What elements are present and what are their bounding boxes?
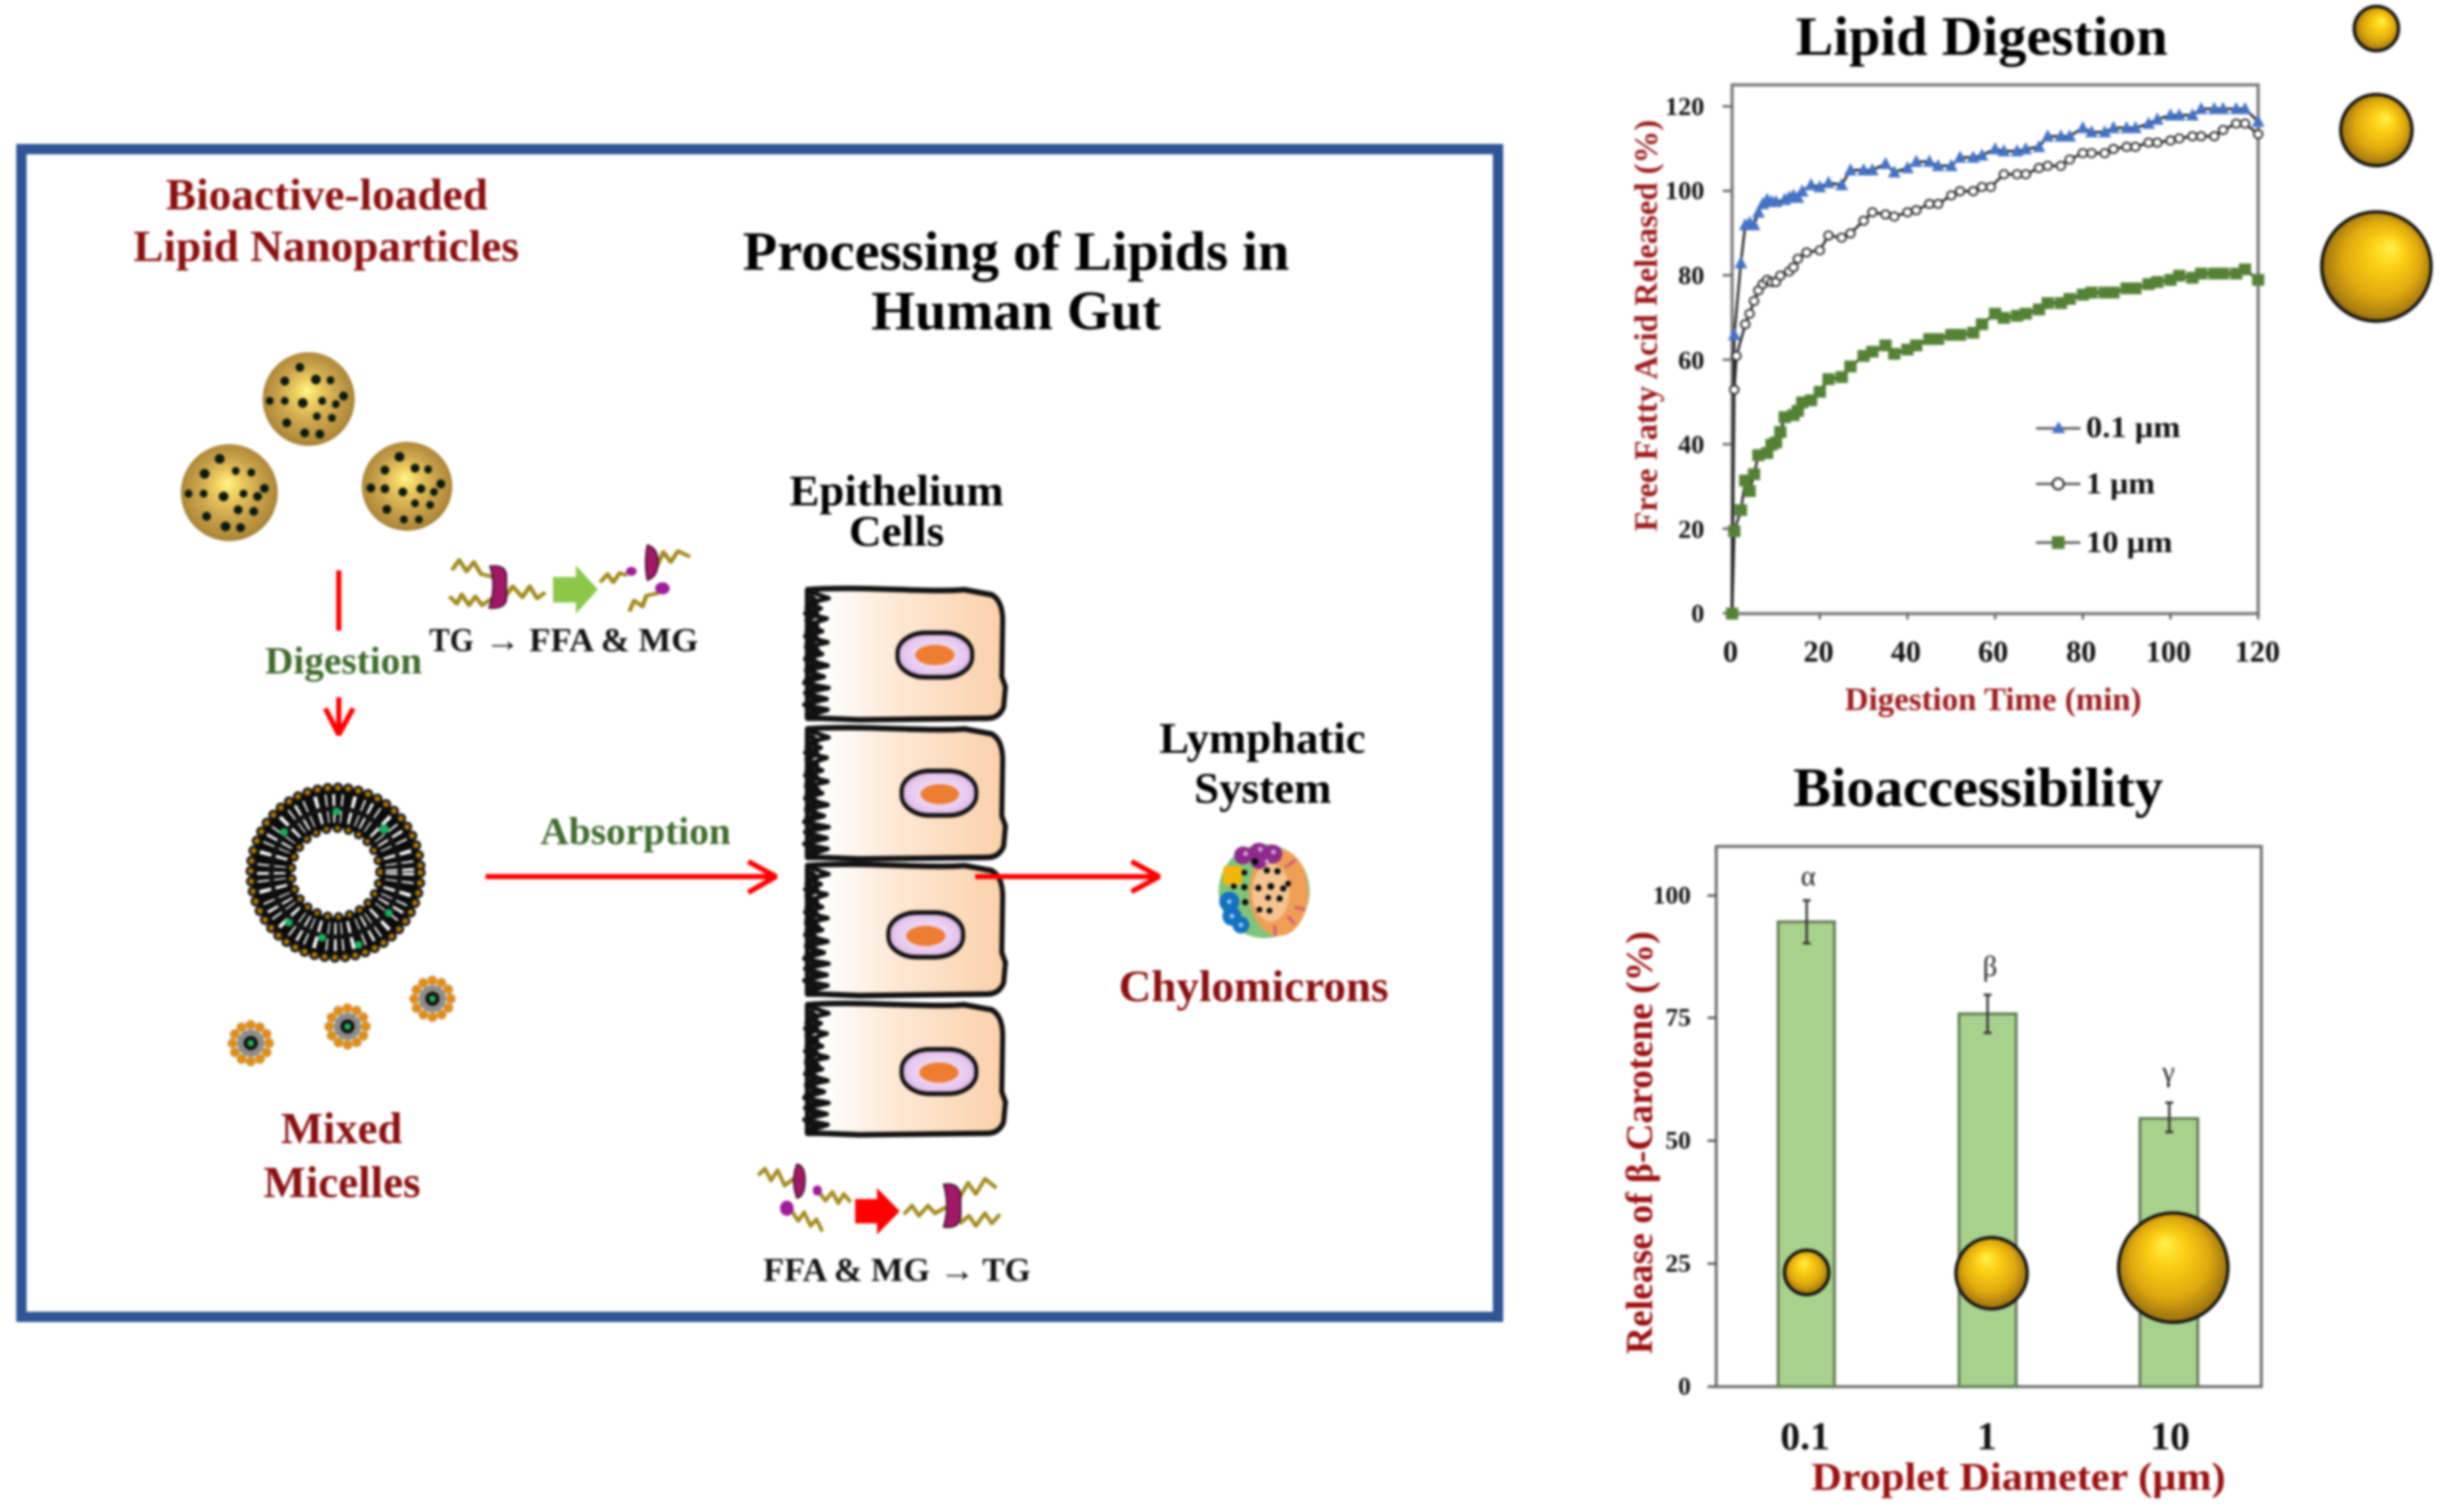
- heading: processing of lipids: [743, 221, 1289, 342]
- arrow: absorption: [486, 862, 776, 892]
- label: bioactive-loaded lipid nanoparticles: Lipid Nanoparticles: [133, 222, 519, 271]
- arrow: to lymphatic system: [975, 862, 1159, 892]
- series: 1 micron: [1732, 124, 2258, 613]
- icon: lipid micelle ring: [251, 788, 421, 957]
- y axis labels: 0: [1692, 600, 1704, 628]
- legend: 0.1 µm: [2086, 411, 2180, 444]
- label: FFA and MG to TG: →: [939, 1253, 975, 1289]
- x axis labels: 0: [1723, 635, 1738, 669]
- x axis labels: 0.1: [1781, 1414, 1830, 1458]
- x axis labels: [1781, 1414, 2190, 1458]
- label: epithelium cells: [789, 466, 1004, 555]
- panel: processing of lipids in human gut: [21, 149, 1498, 1317]
- bars: [1778, 922, 2198, 1387]
- label: FFA and MG to TG: TG: [982, 1253, 1031, 1289]
- series: 10 micron: [1732, 270, 2258, 614]
- legend: 1 µm: [2086, 467, 2155, 501]
- x axis labels: 100: [2145, 635, 2192, 669]
- significance letters: α: [1801, 860, 1816, 892]
- legend: [2036, 411, 2180, 559]
- heading: processing of lipids: Human Gut: [871, 281, 1161, 342]
- x axis labels: 60: [1978, 635, 2008, 669]
- label: lymphatic system: Lymphatic: [1159, 714, 1366, 762]
- y axis labels: 40: [1678, 431, 1704, 459]
- y axis title: Free Fatty Acid Released (%): [1627, 120, 1664, 532]
- arrow: digestion (upper segment): [336, 570, 341, 631]
- label: TG to FFA and MG: FFA & MG: [529, 623, 698, 659]
- y axis labels: [1653, 881, 1691, 1400]
- label: FFA and MG to TG: FFA & MG: [763, 1253, 930, 1289]
- heading: lipid digestion: Lipid Digestion: [1796, 6, 2168, 67]
- icon: lipid nanoparticles with bioactive dots: [181, 352, 452, 541]
- label: lymphatic system: System: [1194, 764, 1331, 812]
- label: mixed micelles: Micelles: [263, 1158, 421, 1207]
- series: 0.1 micron: [1732, 109, 2258, 613]
- x axis labels: 120: [2234, 635, 2280, 669]
- bar chart: bioaccessibility: [1619, 846, 2261, 1499]
- label: TG to FFA and MG: →: [485, 623, 521, 659]
- y axis labels: 75: [1665, 1003, 1691, 1031]
- icon: triglyceride to fatty acids reaction: [450, 545, 690, 614]
- icon: chylomicron particle: [1219, 842, 1310, 938]
- label: FFA and MG to TG: [763, 1253, 1031, 1289]
- x axis title: Droplet Diameter (µm): [1811, 1454, 2226, 1499]
- x axis labels: 80: [2066, 635, 2096, 669]
- heading: processing of lipids: Processing of Lipids in: [743, 221, 1289, 282]
- error bars: [1803, 900, 2173, 1132]
- icon: triglyceride resynthesis reaction: [758, 1165, 1000, 1234]
- x axis labels: 1: [1977, 1414, 1996, 1458]
- label: TG to FFA and MG: TG: [429, 623, 474, 659]
- label: bioactive-loaded lipid nanoparticles: Bioactive-loaded: [166, 171, 488, 220]
- y axis labels: 20: [1678, 516, 1704, 544]
- x axis labels: 10: [2150, 1414, 2190, 1458]
- x axis labels: [1723, 635, 2280, 669]
- label: absorption: Absorption: [540, 809, 731, 853]
- label: digestion: Digestion: [265, 639, 422, 682]
- y axis labels: 100: [1653, 881, 1691, 909]
- label: mixed micelles: Mixed: [281, 1104, 402, 1153]
- y axis labels: 50: [1665, 1126, 1691, 1154]
- y axis labels: 60: [1678, 347, 1704, 375]
- label: chylomicrons: Chylomicrons: [1119, 962, 1389, 1011]
- label: bioactive-loaded lipid nanoparticles: [133, 171, 519, 271]
- legend: 10 µm: [2086, 526, 2172, 559]
- icon: small mixed micelles: [232, 980, 451, 1061]
- significance letters: β: [1983, 950, 1997, 982]
- x axis labels: 40: [1891, 635, 1921, 669]
- y axis labels: 100: [1665, 177, 1704, 205]
- heading: bioaccessibility: Bioaccessibility: [1793, 758, 2163, 819]
- label: epithelium cells: Epithelium: [789, 466, 1004, 515]
- line chart: lipid digestion: [1627, 85, 2280, 717]
- x axis labels: 20: [1804, 635, 1834, 669]
- label: TG to FFA and MG: [429, 623, 698, 659]
- icon: droplet sizes key: [2322, 6, 2431, 321]
- y axis labels: 120: [1665, 93, 1704, 121]
- y axis labels: [1665, 93, 1704, 628]
- icon: epithelium cells stack: [804, 589, 1005, 1135]
- x axis title: Digestion Time (min): [1845, 681, 2142, 717]
- label: mixed micelles: [263, 1104, 421, 1207]
- significance letters: [1801, 860, 2175, 1088]
- significance letters: γ: [2161, 1056, 2175, 1088]
- y axis labels: 25: [1665, 1249, 1691, 1277]
- droplets on bars: [1784, 1213, 2228, 1322]
- label: epithelium cells: Cells: [849, 507, 944, 555]
- y axis labels: 80: [1678, 262, 1704, 290]
- label: lymphatic system: [1159, 714, 1366, 812]
- arrow: digestion (lower segment): [325, 697, 353, 735]
- y axis labels: 0: [1678, 1372, 1691, 1400]
- y axis title: Release of β-Carotene (%): [1619, 931, 1661, 1354]
